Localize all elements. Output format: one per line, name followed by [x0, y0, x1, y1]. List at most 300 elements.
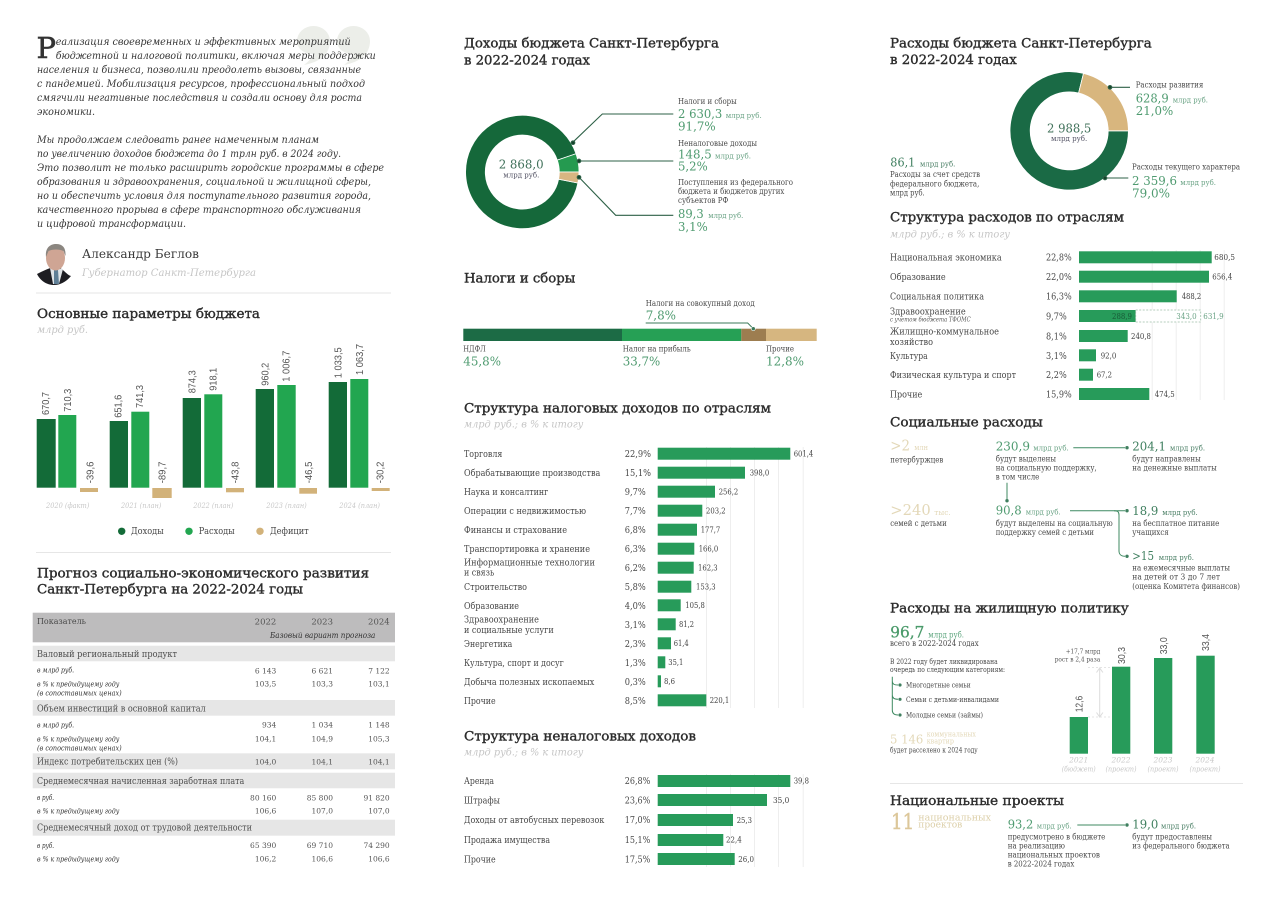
callout: aggregate income tax: 7,8%: [646, 307, 676, 322]
bar chart: housing spending: 30,3: [1116, 647, 1128, 664]
forecast table: 106,6: [312, 855, 333, 864]
bar chart: 4,0%: [625, 602, 646, 612]
bar chart: 7,7%: [625, 507, 646, 517]
forecast table: 85 800: [307, 793, 333, 802]
bar chart: с учетом бюджета ТФОМС: [890, 317, 971, 324]
panel: governor quote: [36, 26, 384, 285]
bar chart: 15,9%: [1046, 390, 1072, 400]
bar chart: revenue, expenses, deficit: 2021 (план): [120, 501, 161, 510]
quote text: [36, 37, 384, 230]
callout: current expenses: 79,0%: [1132, 185, 1170, 200]
quote text: смягчили негативные последствия и создали основу для роста: [37, 93, 362, 104]
forecast table: Объем инвестиций в основной капитал: [37, 704, 206, 715]
bar chart: 656,4: [1212, 272, 1232, 282]
stat: families: тыс.: [934, 508, 951, 517]
bar chart: хозяйство: [890, 338, 933, 348]
stat: housing total: 96,7: [890, 623, 924, 642]
bar chart: 256,2: [719, 488, 738, 496]
bar chart: 3,1%: [1046, 352, 1067, 362]
bar chart: 8,5%: [625, 697, 646, 707]
label: other: Прочие: [766, 345, 794, 354]
heading: [37, 566, 369, 597]
panel: budget parameters: [37, 307, 390, 537]
connector arrows: [1005, 446, 1129, 558]
stat: free meals: на бесплатное питание: [1132, 519, 1220, 528]
bar chart: 3,1%: [625, 621, 646, 631]
callout: current expenses: [1132, 163, 1240, 200]
forecast table: 6 143: [255, 666, 277, 675]
quote text: образования и здравоохранения, социальной и жилищной сферы,: [37, 177, 371, 188]
connector arrow: [1077, 823, 1129, 827]
forecast table: Показатель: [37, 617, 86, 627]
callout: federal transfers: [678, 178, 793, 234]
forecast table: 104,0: [255, 758, 277, 767]
bar chart: housing spending: (бюджет): [1062, 765, 1096, 774]
bar chart: 2,3%: [625, 640, 646, 650]
callout: federal funds: федерального бюджета,: [890, 179, 979, 188]
heading: Расходы бюджета Санкт-Петербурга: [890, 37, 1152, 52]
bar chart: Прочие: [464, 856, 496, 866]
stat: communal flats: будет расселено к 2024 году: [890, 746, 978, 754]
text: queue categories: Многодетные семьи: [906, 682, 971, 690]
bar chart: 15,1%: [625, 836, 651, 846]
bar chart: 1,3%: [625, 659, 646, 669]
bar chart: revenue, expenses, deficit: 874,3: [186, 370, 198, 393]
forecast table: 104,9: [312, 734, 333, 743]
stat: free meals: млрд руб.: [1162, 508, 1198, 517]
bar chart: 203,2: [706, 506, 726, 516]
stat: cash payments: на денежные выплаты: [1132, 464, 1217, 473]
bar chart: Социальная политика: [890, 292, 984, 302]
forecast table: в % к предыдущему году: [37, 807, 120, 815]
stat: cash payments: [1132, 439, 1217, 473]
bar chart: 9,7%: [1046, 312, 1067, 322]
bar chart: housing spending: 2022: [1110, 756, 1131, 765]
bar chart: 8,1%: [1046, 332, 1067, 342]
callout: taxes and fees: 91,7%: [678, 119, 716, 134]
stat: eleven projects: [891, 810, 992, 835]
legend: Доходы: [131, 527, 164, 537]
stat: social support: будут выделены: [996, 455, 1057, 464]
bar chart: 5,8%: [625, 583, 646, 593]
panel: non-tax revenue: [464, 730, 809, 867]
forecast table: (в сопоставимых ценах): [37, 690, 122, 698]
quote text: по увеличению доходов бюджета до 1 трлн руб. в 2024 году.: [37, 149, 341, 160]
bar chart: Финансы и страхование: [464, 526, 567, 536]
heading: в 2022-2024 годах: [464, 53, 591, 68]
bar chart: 25,3: [737, 816, 752, 825]
bar chart: Добыча полезных ископаемых: [464, 677, 594, 688]
bar chart: 220,1: [710, 696, 729, 705]
quote text: экономики.: [37, 107, 95, 118]
stat: free meals: 18,9: [1132, 503, 1158, 518]
stat: eleven projects: 11: [891, 810, 914, 835]
callout: federal transfers: субъектов РФ: [678, 196, 729, 205]
stat: social support: млрд руб.: [1033, 444, 1069, 453]
bar chart: Доходы от автобусных перевозок: [464, 815, 605, 826]
stat: monthly payments: [1132, 548, 1240, 591]
callout: current expenses: Расходы текущего характера: [1132, 163, 1240, 172]
icon: governor portrait: [37, 244, 71, 285]
forecast table: (в сопоставимых ценах): [37, 744, 122, 752]
callout: non-tax revenue: млрд руб.: [715, 151, 751, 160]
bar chart: 15,1%: [625, 469, 651, 479]
stat: housing total: всего в 2022-2024 годах: [890, 639, 979, 648]
stat: housing total: [890, 623, 979, 648]
bar chart: housing spending: 2024: [1194, 756, 1215, 765]
forecast table: в млрд руб.: [37, 721, 74, 729]
quote text: качественного прорыва в сфере транспортного обслуживания: [37, 205, 361, 216]
callout: federal transfers: бюджета и бюджетов других: [678, 187, 785, 196]
donut chart: expenses: 2 988,5: [1047, 121, 1091, 136]
bar chart: housing spending: 2021: [1068, 756, 1088, 765]
stat: residents: млн: [914, 443, 928, 452]
stat: residents: петербуржцев: [890, 455, 944, 464]
bar chart: 67,2: [1097, 370, 1112, 380]
bar chart: revenue, expenses, deficit: 960,2: [259, 363, 271, 386]
bar chart: и социальные услуги: [464, 626, 554, 636]
panel: national projects: [890, 794, 1230, 868]
callout: development expenses: млрд руб.: [1173, 95, 1208, 104]
bar chart: 35,0: [773, 796, 789, 805]
leader lines: [571, 114, 673, 215]
forecast table: Среднемесячный доход от трудовой деятельности: [37, 824, 252, 834]
callout: development expenses: 628,9: [1136, 90, 1169, 105]
forecast table: 107,0: [312, 806, 333, 815]
forecast table: 104,1: [255, 734, 276, 743]
bar chart: Штрафы: [464, 796, 500, 806]
text: queue categories: Молодые семьи (займы): [906, 711, 983, 719]
donut chart: revenue: млрд руб.: [503, 170, 539, 179]
forecast table: 104,1: [312, 758, 333, 767]
bar chart: 26,8%: [625, 777, 651, 787]
growth arrow: +17,7 млрд: [1066, 647, 1100, 655]
forecast table: 2022: [255, 618, 276, 628]
callout: federal transfers: Поступления из федерального: [678, 178, 793, 187]
bar chart: revenue, expenses, deficit: 1 033,5: [333, 347, 345, 378]
forecast table: 74 290: [363, 841, 390, 850]
bar chart: и связь: [464, 569, 494, 579]
stat: cash payments: млрд руб.: [1170, 444, 1205, 453]
callout: federal funds: млрд руб.: [920, 160, 955, 169]
bar chart: revenue, expenses, deficit: 1 006,7: [281, 351, 293, 382]
stat: family support: [996, 502, 1113, 537]
donut chart: expenses: [1010, 72, 1128, 190]
quote text: бюджетной и налоговой политики, включая меры поддержки: [56, 51, 376, 62]
stat: communal flats: квартир: [927, 736, 954, 745]
label: profit tax: [623, 345, 691, 368]
bar chart: 9,7%: [625, 488, 646, 498]
governor title: Губернатор Санкт-Петербурга: [81, 267, 256, 279]
text: queue categories: В 2022 году будет ликвидирована: [890, 658, 998, 666]
bar chart: revenue, expenses, deficit: 670,7: [40, 392, 52, 415]
label: profit tax: 33,7%: [623, 353, 660, 368]
bar chart: 6,2%: [625, 564, 646, 574]
bar chart: Здравоохранение: [464, 616, 539, 626]
bar chart: Наука и консалтинг: [464, 488, 549, 498]
forecast table: 106,6: [368, 855, 390, 864]
bar chart: housing spending: (проект): [1190, 765, 1221, 774]
stat: residents: [890, 439, 944, 464]
stat: federal contribution: млрд руб.: [1161, 821, 1196, 830]
bar chart: 92,0: [1101, 351, 1116, 360]
bar chart: Аренда: [464, 777, 494, 787]
callout: aggregate income tax: Налоги на совокупный доход: [646, 299, 755, 308]
forecast table: 91 820: [363, 793, 390, 802]
bar chart: revenue, expenses, deficit: -43,8: [229, 461, 241, 483]
bar chart: revenue, expenses, deficit: [37, 344, 390, 510]
governor name: Александр Беглов: [82, 247, 199, 261]
forecast table: 104,1: [368, 758, 390, 767]
stat: social support: 230,9: [996, 439, 1030, 454]
text: queue categories: Семьи с детьми-инвалидами: [906, 696, 999, 704]
callout: taxes and fees: [678, 97, 762, 134]
heading: Основные параметры бюджета: [37, 307, 260, 322]
stat: national projects budget: на реализацию: [1008, 841, 1065, 850]
bar chart: 17,0%: [625, 816, 651, 826]
stat: family support: поддержку семей с детьми: [996, 528, 1094, 537]
bar chart: Торговля: [464, 450, 503, 460]
subheading: млрд руб.; в % к итогу: [464, 747, 584, 759]
label: other: 12,8%: [766, 353, 804, 368]
forecast table: 934: [262, 720, 277, 729]
forecast table: в руб.: [37, 794, 54, 802]
stat: communal flats: коммунальных: [927, 730, 977, 739]
bar chart: housing spending: 33,0: [1158, 637, 1170, 654]
label: other: [766, 345, 804, 368]
heading: Структура налоговых доходов по отраслям: [464, 402, 771, 417]
callout: federal transfers: млрд руб.: [708, 211, 743, 220]
forecast table: Индекс потребительских цен (%): [37, 757, 178, 768]
bar chart: Физическая культура и спорт: [890, 371, 1016, 381]
panel: social spending: [890, 416, 1240, 591]
text: queue categories: очередь по следующим категориям:: [890, 666, 1005, 674]
panel: socio-economic forecast: [33, 566, 395, 864]
forecast table: 6 621: [312, 666, 333, 675]
bar chart: 22,8%: [1046, 254, 1072, 264]
bar chart: Транспортировка и хранение: [464, 545, 590, 555]
heading: Структура расходов по отраслям: [890, 211, 1124, 226]
bar chart: Культура, спорт и досуг: [464, 659, 564, 669]
bar chart: 61,4: [674, 639, 689, 648]
forecast table: 69 710: [307, 841, 333, 850]
bar chart: housing spending: 2023: [1152, 756, 1173, 765]
forecast table: 7 122: [368, 666, 390, 675]
bar chart: [464, 447, 813, 708]
bar chart: 81,2: [679, 620, 694, 629]
callout: non-tax revenue: [678, 139, 758, 174]
donut chart: revenue: 2 868,0: [499, 156, 544, 171]
stat: national projects budget: 93,2: [1008, 816, 1033, 831]
forecast table: в руб.: [37, 842, 54, 850]
bar chart: revenue, expenses, deficit: 1 063,7: [354, 344, 366, 375]
stat: monthly payments: (оценка Комитета финансов): [1132, 582, 1240, 591]
stat: federal contribution: 19,0: [1132, 816, 1158, 831]
forecast table: [33, 613, 395, 864]
callout: taxes and fees: 2 630,3: [678, 106, 722, 121]
bar chart: revenue, expenses, deficit: -30,2: [374, 461, 386, 483]
bar chart: revenue, expenses, deficit: 710,3: [62, 389, 74, 412]
callout: federal funds: [890, 155, 980, 198]
legend: Расходы: [199, 527, 235, 537]
bar chart: 177,7: [701, 526, 720, 534]
heading: Расходы на жилищную политику: [890, 601, 1129, 616]
forecast table: 105,3: [368, 734, 390, 743]
bar chart: revenue, expenses, deficit: 918,1: [208, 368, 220, 391]
bar chart: Образование: [890, 272, 946, 283]
forecast table: 1 148: [368, 720, 390, 729]
callout: development expenses: 21,0%: [1136, 103, 1173, 118]
bar chart: 601,4: [794, 450, 813, 458]
stat: social support: [996, 439, 1097, 482]
bar chart: 680,5: [1214, 253, 1235, 262]
text: queue categories: [890, 658, 1005, 719]
forecast table: 106,6: [255, 806, 277, 815]
bar chart: 22,9%: [625, 450, 651, 460]
forecast table: Базовый вариант прогноза: [269, 631, 376, 640]
stacked bar: [463, 329, 817, 341]
bar chart: 17,5%: [625, 856, 651, 866]
bar chart: 474,5: [1155, 390, 1175, 399]
forecast table: 107,0: [368, 806, 390, 815]
stat: social support: на социальную поддержку,: [996, 464, 1097, 473]
callout: federal funds: млрд руб.: [890, 189, 925, 198]
bar chart: Образование: [464, 601, 519, 612]
stat: federal contribution: из федерального бюджета: [1132, 841, 1230, 850]
label: personal income tax: [463, 345, 501, 368]
heading: [890, 37, 1152, 68]
bar chart: 153,3: [696, 582, 716, 592]
bar chart: 105,8: [685, 601, 705, 610]
quote text: и цифровой трансформации.: [37, 219, 186, 230]
stat: families: >240: [890, 503, 931, 519]
growth arrow: [1055, 647, 1112, 717]
bar chart: revenue, expenses, deficit: -46,5: [303, 461, 315, 483]
forecast table: в % к предыдущему году: [37, 856, 120, 864]
bar chart: 166,0: [699, 544, 718, 554]
quote text: Это позволит не только расширить городские программы в сфере: [37, 163, 384, 174]
stat: free meals: [1132, 503, 1220, 537]
quote text: но и обеспечить условия для поступательного развития города,: [37, 191, 371, 202]
bar chart: revenue, expenses, deficit: 741,3: [134, 385, 146, 408]
bar chart: Прочие: [890, 390, 922, 400]
heading: Национальные проекты: [890, 794, 1064, 809]
subheading: млрд руб.; в % к итогу: [464, 418, 584, 430]
stat: eleven projects: национальных: [918, 812, 992, 823]
callout: federal funds: 86,1: [890, 155, 915, 170]
bar chart: revenue, expenses, deficit: 651,6: [113, 395, 125, 418]
stat: monthly payments: >15: [1132, 548, 1154, 563]
callout: development expenses: [1136, 81, 1208, 118]
quote text: еализация своевременных и эффективных мероприятий: [56, 37, 351, 48]
forecast table: 103,3: [312, 680, 333, 689]
bar chart: 240,8: [1131, 332, 1151, 341]
subheading: млрд руб.; в % к итогу: [890, 228, 1011, 240]
bar chart: Энергетика: [464, 640, 512, 650]
forecast table: в млрд руб.: [37, 667, 74, 675]
legend: Дефицит: [270, 527, 309, 537]
forecast table: 103,1: [368, 680, 390, 689]
stat: residents: >2: [890, 439, 910, 455]
panel: housing policy: [890, 601, 1221, 774]
bar chart: Жилищно-коммунальное: [890, 328, 999, 338]
stat: families: семей с детьми: [890, 519, 947, 528]
panel: tax revenue by sector: [464, 402, 813, 708]
label: profit tax: Налог на прибыль: [623, 345, 691, 354]
callout: taxes and fees: Налоги и сборы: [678, 97, 737, 106]
bar chart: 6,8%: [625, 526, 646, 536]
stat: national projects budget: национальных проектов: [1008, 850, 1100, 859]
stat: communal flats: [890, 730, 978, 754]
subheading: млрд руб.: [37, 324, 88, 336]
bar chart: revenue, expenses, deficit: 2022 (план): [192, 501, 233, 510]
bar chart: Информационные технологии: [464, 558, 595, 568]
stat: national projects budget: [1008, 816, 1106, 868]
stat: federal contribution: будут предоставлены: [1132, 832, 1213, 841]
legend: [118, 527, 309, 537]
bar chart: 22,4: [726, 836, 742, 844]
bar chart: Продажа имущества: [464, 836, 550, 846]
bar chart: revenue, expenses, deficit: 2023 (план): [265, 501, 307, 510]
forecast table: в % к предыдущему году: [37, 735, 120, 743]
callout: current expenses: млрд руб.: [1180, 178, 1216, 187]
donut chart: expenses: млрд руб.: [1051, 134, 1087, 143]
heading: Санкт-Петербурга на 2022-2024 годы: [37, 582, 303, 597]
callout: development expenses: Расходы развития: [1136, 81, 1203, 90]
bar chart: Национальная экономика: [890, 254, 1002, 264]
stat: cash payments: будут направлены: [1132, 455, 1201, 464]
panel: taxes and fees: [463, 272, 817, 368]
bar chart: 8,6: [664, 677, 675, 686]
bar chart: Культура: [890, 352, 928, 362]
bar chart: 162,3: [698, 564, 718, 572]
stat: monthly payments: на ежемесячные выплаты: [1132, 564, 1231, 573]
bar chart: housing spending: [1055, 634, 1221, 774]
bar chart: [890, 250, 1235, 400]
bar chart: housing spending: (проект): [1106, 765, 1137, 774]
stat: eleven projects: проектов: [918, 820, 962, 831]
stat: family support: 90,8: [996, 502, 1022, 517]
stat: federal contribution: [1132, 816, 1230, 850]
forecast table: 1 034: [312, 720, 333, 729]
stat: national projects budget: млрд руб.: [1037, 821, 1072, 830]
heading: Налоги и сборы: [464, 272, 575, 287]
stat: monthly payments: млрд руб.: [1159, 553, 1194, 562]
stat: national projects budget: в 2022-2024 годах: [1008, 859, 1075, 868]
forecast table: 106,2: [255, 855, 277, 864]
callout: aggregate income tax: [646, 299, 755, 331]
forecast table: 65 390: [250, 841, 277, 850]
quote text: населения и бизнеса, позволили преодолеть вызовы, связанные: [37, 65, 361, 76]
quote text: с пандемией. Мобилизация ресурсов, профессиональный подход: [37, 79, 365, 90]
bar chart: housing spending: (проект): [1148, 765, 1179, 774]
bar chart: housing spending: 33,4: [1200, 634, 1212, 651]
bar chart: 398,0: [750, 468, 769, 478]
bar chart: 2,2%: [1046, 371, 1067, 381]
bar chart: revenue, expenses, deficit: -89,7: [156, 461, 168, 483]
forecast table: 103,5: [255, 680, 277, 689]
callout: federal funds: Расходы за счет средств: [890, 170, 980, 179]
callout: federal transfers: 89,3: [678, 206, 704, 221]
heading: Социальные расходы: [890, 416, 1043, 431]
forecast table: Валовый региональный продукт: [37, 650, 177, 660]
forecast table: Среднемесячная начисленная заработная плата: [37, 776, 244, 787]
stat: family support: будут выделены на социальную: [996, 519, 1113, 528]
callout: federal transfers: 3,1%: [678, 219, 708, 234]
forecast table: в % к предыдущему году: [37, 681, 120, 689]
quote text: Мы продолжаем следовать ранее намеченным планам: [36, 135, 319, 146]
bar chart: 23,6%: [625, 796, 651, 806]
